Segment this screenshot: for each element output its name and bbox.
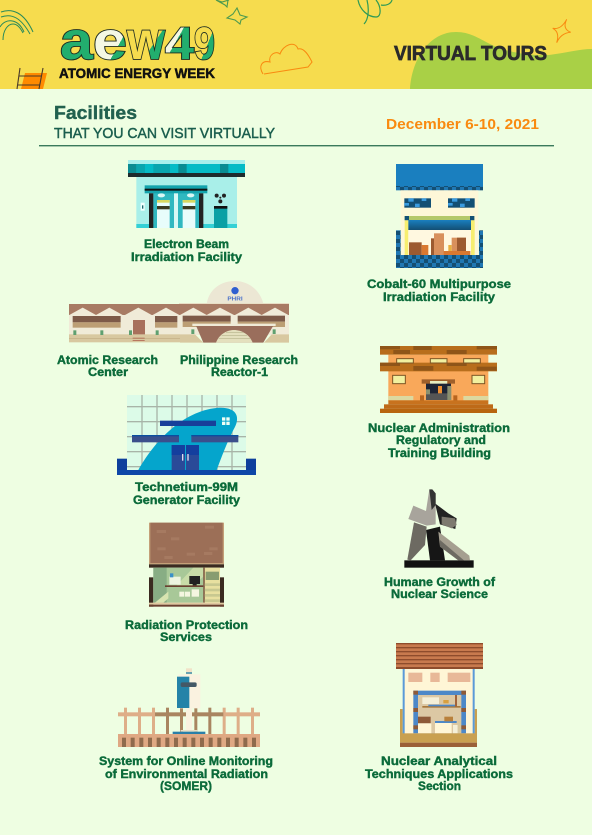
illustration: Radiation Protection Services	[149, 523, 224, 607]
doodle: cloud	[261, 44, 312, 74]
illustration: Nuclear Analytical Techniques Applications Section	[396, 643, 483, 747]
label: Radiation Protection Services	[125, 618, 248, 644]
logo: aew49: w	[126, 11, 166, 71]
label: System for Online Monitoring of Environmental Radiation (SOMER): of Environmental Radiation	[105, 767, 268, 781]
label: Nuclear Analytical Techniques Applications Section: Nuclear Analytical	[381, 754, 497, 768]
illustration: Atomic Research Center and Philippine Research Reactor-1: PHRI	[227, 297, 243, 303]
label: Nuclear Analytical Techniques Applications Section: Section	[418, 779, 461, 793]
label: Nuclear Administration Regulatory and Training Building: Regulatory and	[396, 433, 486, 447]
label: Technetium-99M Generator Facility: Generator Facility	[133, 493, 240, 507]
logo: aew49	[60, 11, 215, 71]
label: Philippine Research Reactor-1: Reactor-1	[211, 365, 268, 379]
label: Nuclear Analytical Techniques Applications Section	[365, 754, 513, 793]
label: System for Online Monitoring of Environmental Radiation (SOMER): (SOMER)	[160, 779, 212, 793]
header band	[0, 0, 592, 89]
illustration: Nuclear Administration Regulatory and Training Building	[380, 346, 497, 413]
illustration: Electron Beam Irradiation Facility	[128, 160, 245, 228]
label: Philippine Research Reactor-1	[180, 353, 298, 379]
label: Humane Growth of Nuclear Science	[384, 575, 496, 601]
label: System for Online Monitoring of Environmental Radiation (SOMER)	[99, 754, 273, 793]
label: Electron Beam Irradiation Facility: Irradiation Facility	[131, 250, 242, 264]
illustration: System for Online Monitoring of Environmental Radiation	[118, 668, 260, 747]
date: December 6-10, 2021	[386, 116, 539, 133]
label: Nuclear Administration Regulatory and Training Building: Nuclear Administration	[368, 421, 510, 435]
label: Cobalt-60 Multipurpose Irradiation Facility: Irradiation Facility	[383, 290, 495, 304]
illustration: Cobalt-60 Multipurpose Irradiation Facility	[396, 164, 483, 268]
header title: VIRTUAL TOURS	[394, 43, 547, 65]
illustration: Humane Growth of Nuclear Science statue	[404, 489, 474, 568]
label: Radiation Protection Services: Services	[160, 630, 212, 644]
label: Philippine Research Reactor-1: Philippine Research	[180, 353, 298, 367]
label: Radiation Protection Services: Radiation Protection	[125, 618, 248, 632]
label: Nuclear Administration Regulatory and Training Building	[368, 421, 510, 460]
logo: aew49: e	[93, 11, 127, 71]
logo: aew49: a	[60, 11, 94, 71]
subheading: THAT YOU CAN VISIT VIRTUALLY	[54, 126, 275, 142]
label: Humane Growth of Nuclear Science: Humane Growth of	[384, 575, 496, 589]
reactor dome	[207, 281, 263, 304]
logo subtitle: ATOMIC ENERGY WEEK	[59, 65, 215, 81]
illustration: Atomic Research Center and Philippine Research Reactor-1	[69, 281, 289, 343]
green hill	[410, 32, 592, 89]
logo: aew49: 9	[194, 18, 215, 69]
heading: Facilities: Facilities	[54, 103, 137, 123]
label: Atomic Research Center: Center	[88, 365, 128, 379]
logo: aew49: 4	[165, 18, 194, 69]
label: Humane Growth of Nuclear Science: Nuclear Science	[391, 587, 488, 601]
doodle: sparkle	[553, 19, 571, 43]
label: Technetium-99M Generator Facility	[133, 480, 240, 507]
illustration: Technetium-99M Generator Facility	[117, 395, 256, 475]
label: Cobalt-60 Multipurpose Irradiation Facility	[367, 277, 511, 304]
label: Nuclear Administration Regulatory and Training Building: Training Building	[388, 446, 491, 460]
label: Electron Beam Irradiation Facility: Electron Beam	[144, 237, 229, 251]
doodle: rainbow	[0, 11, 33, 40]
label: Technetium-99M Generator Facility: Technetium-99M	[135, 480, 238, 494]
doodle: squiggle	[358, 0, 392, 24]
label: Electron Beam Irradiation Facility	[131, 237, 242, 264]
label: Nuclear Analytical Techniques Applications Section: Techniques Applications	[365, 767, 513, 781]
doodle: stars	[216, 0, 247, 24]
label: Atomic Research Center: Atomic Research	[57, 353, 158, 367]
label: System for Online Monitoring of Environmental Radiation (SOMER): System for Online Monitoring	[99, 754, 273, 768]
label: Cobalt-60 Multipurpose Irradiation Facility: Cobalt-60 Multipurpose	[367, 277, 511, 291]
doodle: ladder	[17, 68, 47, 89]
label: Atomic Research Center	[57, 353, 158, 379]
